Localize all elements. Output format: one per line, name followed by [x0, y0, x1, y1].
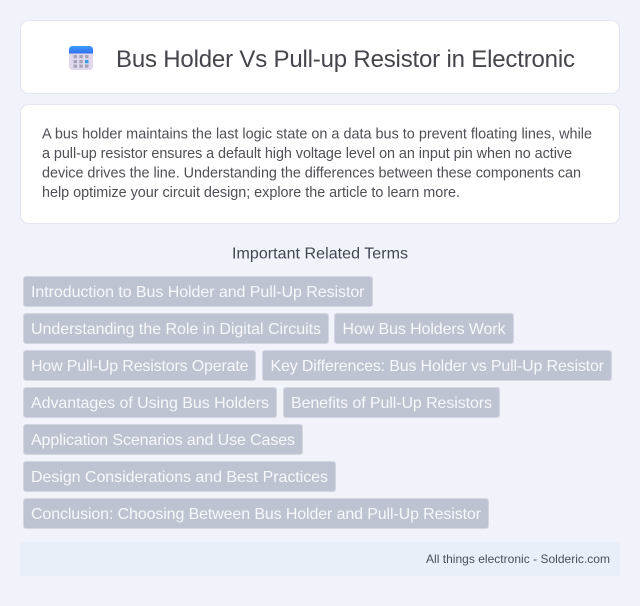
text block: summary: a pull-up resistor ensures a default high voltage level on an input pin when no active	[42, 146, 572, 162]
footer credit: All things electronic - Solderic.com	[426, 552, 610, 566]
tag: design considerations	[24, 462, 336, 492]
tag: advantages of bus holders	[24, 388, 276, 418]
title: Bus Holder Vs Pull-up Resistor in Electronic	[116, 46, 575, 73]
tag: role in digital circuits	[24, 314, 328, 344]
tag: benefits of pull-up resistors: Benefits of Pull-Up Resistors	[291, 395, 492, 412]
tag: how bus holders work	[334, 314, 514, 344]
tag: application scenarios: Application Scenarios and Use Cases	[31, 432, 295, 449]
panel: header	[20, 20, 620, 94]
tag: how bus holders work: How Bus Holders Work	[342, 321, 506, 338]
tag: conclusion: Conclusion: Choosing Between Bus Holder and Pull-Up Resistor	[31, 506, 482, 523]
panel: summary paragraph	[20, 104, 620, 224]
tag: application scenarios	[24, 424, 302, 454]
footer bar	[20, 542, 620, 576]
tag: key differences	[262, 350, 612, 380]
tag: conclusion	[24, 498, 488, 528]
tag: design considerations: Design Considerations and Best Practices	[31, 469, 328, 486]
tag: advantages of bus holders: Advantages of Using Bus Holders	[31, 395, 269, 412]
icon: calendar grid	[69, 46, 93, 70]
tag list	[24, 276, 612, 528]
tag: introduction: Introduction to Bus Holder and Pull-Up Resistor	[31, 284, 365, 301]
tag: benefits of pull-up resistors	[284, 388, 500, 418]
heading: important related terms: Important Related Terms	[232, 246, 408, 262]
text block: summary: device drives the line. Understanding the differences between these components can	[42, 166, 581, 182]
tag: how pull-up resistors operate	[24, 350, 256, 380]
tag: introduction	[24, 276, 372, 306]
text block: summary: A bus holder maintains the last logic state on a data bus to prevent floating lines, while	[42, 126, 592, 142]
tag: role in digital circuits: Understanding the Role in Digital Circuits	[31, 321, 321, 338]
tag: key differences: Key Differences: Bus Holder vs Pull-Up Resistor	[270, 358, 605, 375]
text block: summary: help optimize your circuit design; explore the article to learn more.	[42, 185, 460, 201]
tag: how pull-up resistors operate: How Pull-Up Resistors Operate	[31, 358, 249, 375]
text block: summary	[42, 126, 592, 201]
